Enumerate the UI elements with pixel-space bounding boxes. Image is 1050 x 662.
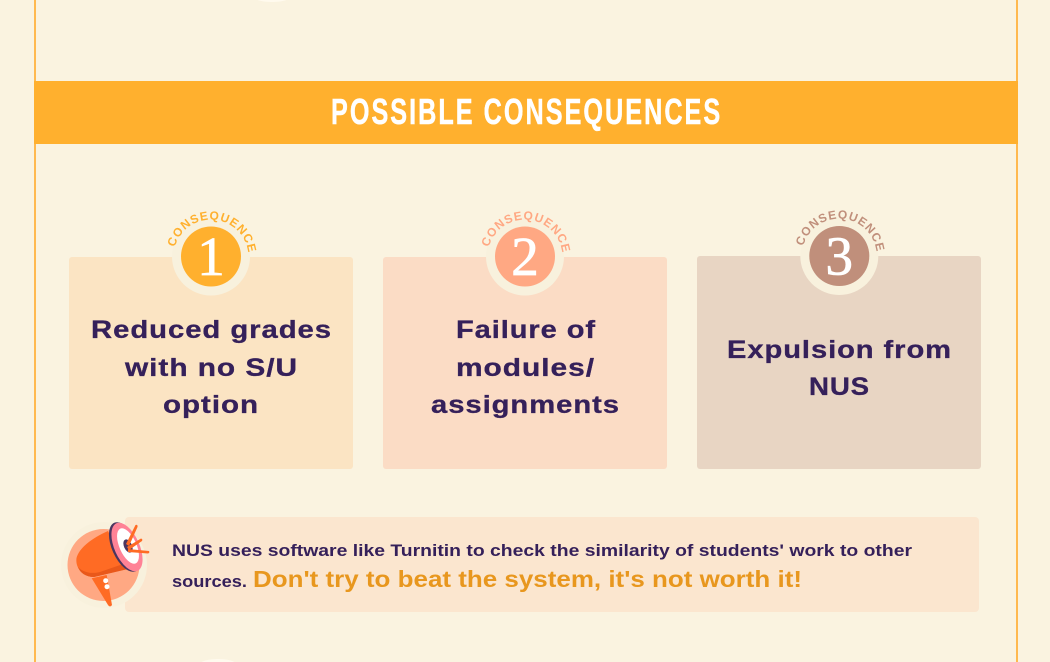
- panel: consequence 1: [69, 211, 353, 469]
- callout text: NUS uses software like Turnitin to check the similarity of students' work to other: [172, 541, 912, 560]
- callout banner: [125, 517, 979, 612]
- badge: consequence 3: [796, 210, 884, 295]
- panel text: failure of modules: modules/: [456, 354, 595, 382]
- panel text: reduced grades: with no S/U: [124, 354, 298, 382]
- icon: megaphone: [61, 518, 149, 608]
- panel text: expulsion from NUS: [727, 336, 952, 401]
- badge: consequence 2: 2: [511, 226, 539, 287]
- panel text: expulsion from NUS: NUS: [809, 373, 870, 401]
- panel text: failure of modules: assignments: [431, 391, 620, 419]
- badge: consequence 2: CONSEQUENCE: [482, 211, 570, 252]
- badge: consequence 1: CONSEQUENCE: [168, 211, 256, 252]
- panel text: expulsion from NUS: Expulsion from: [727, 336, 952, 364]
- heading banner: possible consequences: [34, 81, 1018, 144]
- panel text: reduced grades: option: [163, 391, 259, 419]
- callout text: [172, 541, 912, 592]
- callout text: sources.: [172, 572, 247, 591]
- heading text: POSSIBLE CONSEQUENCES: [331, 92, 720, 132]
- panel: consequence 3: [697, 210, 981, 469]
- panel text: reduced grades: [91, 316, 332, 419]
- badge: consequence 3: CONSEQUENCE: [796, 210, 884, 252]
- badge: consequence 1: [168, 211, 256, 296]
- panel text: failure of modules: [431, 316, 620, 419]
- badge: consequence 3: 3: [826, 226, 853, 286]
- badge: consequence 1: 1: [197, 226, 225, 287]
- panel text: failure of modules: Failure of: [456, 316, 596, 344]
- callout text: Don't try to beat the system, it's not worth it!: [253, 566, 802, 592]
- panel: consequence 2: [383, 211, 667, 469]
- badge: consequence 2: [482, 211, 570, 296]
- panel text: reduced grades: Reduced grades: [91, 316, 332, 344]
